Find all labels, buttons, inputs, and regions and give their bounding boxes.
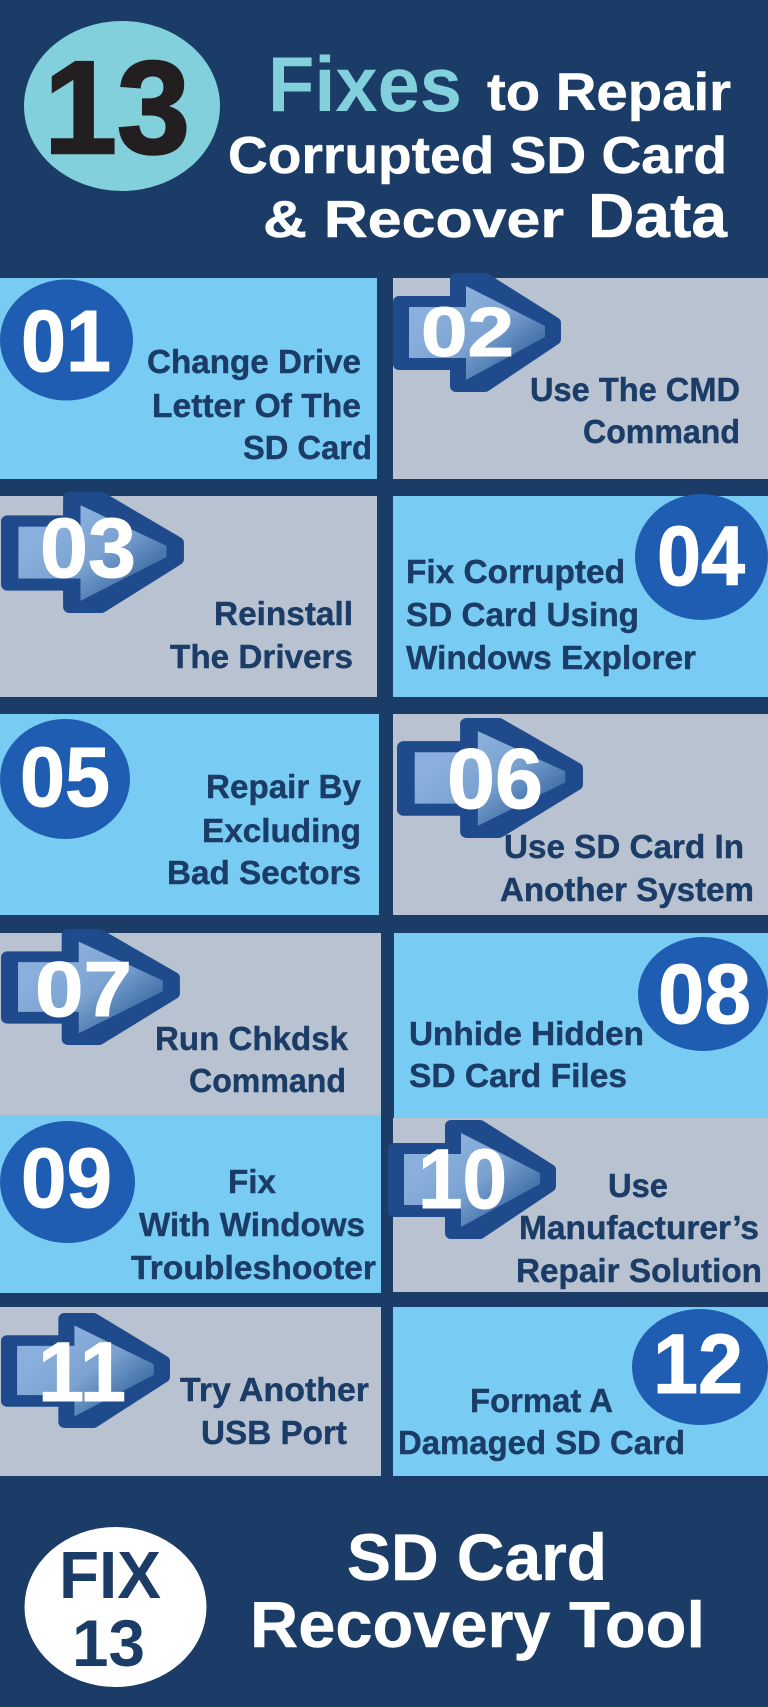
title: Corrupted SD Card xyxy=(228,127,727,185)
text: Change Drive Letter Of The SD Card: Letter Of The xyxy=(152,387,361,424)
panel: fix 01 xyxy=(0,278,377,479)
text: Fix With Windows Troubleshooter: With Windows xyxy=(139,1206,365,1243)
text: Use SD Card In Another System xyxy=(500,828,754,908)
footer title: Recovery Tool xyxy=(250,1588,705,1661)
text: Fix With Windows Troubleshooter xyxy=(131,1163,376,1286)
badge: 04: 04 xyxy=(657,509,745,603)
panel: fix 08 xyxy=(394,933,768,1120)
badge: fix 13 xyxy=(24,1527,206,1687)
text: Change Drive Letter Of The SD Card: SD Card xyxy=(243,429,372,466)
panel: fix 07 xyxy=(0,933,381,1115)
panel: fix 10 xyxy=(393,1118,768,1292)
text: Format A Damaged SD Card xyxy=(398,1382,685,1461)
panel: fix 06 xyxy=(393,714,768,915)
text: Format A Damaged SD Card: Format A xyxy=(470,1382,613,1419)
text: Run Chkdsk Command xyxy=(155,1020,349,1099)
panel: fix 09 xyxy=(0,1115,381,1293)
badge: 13 xyxy=(24,21,220,191)
text: Use The CMD Command: Use The CMD xyxy=(530,371,740,408)
arrow: 07 xyxy=(7,935,174,1039)
text: Fix Corrupted SD Card Using Windows Explorer: Windows Explorer xyxy=(406,639,696,676)
text: Fix Corrupted SD Card Using Windows Explorer: Fix Corrupted xyxy=(406,553,625,590)
title: & Recover xyxy=(263,191,564,249)
panel: fix 05 xyxy=(0,714,379,915)
text: Use SD Card In Another System: Another System xyxy=(500,871,754,908)
badge: fix 13: 13 xyxy=(72,1606,145,1680)
badge: 08 xyxy=(638,937,768,1051)
text: Repair By Excluding Bad Sectors: Excluding xyxy=(202,812,361,849)
panel: fix 04 xyxy=(393,494,768,697)
text: Format A Damaged SD Card: Damaged SD Card xyxy=(398,1424,685,1461)
panel: fix 12 xyxy=(393,1307,768,1476)
title: Fixes xyxy=(268,40,462,128)
text: Reinstall The Drivers: The Drivers xyxy=(170,638,353,675)
number: 02: 02 xyxy=(421,293,514,371)
badge: 04 xyxy=(635,494,768,620)
text: Try Another USB Port xyxy=(180,1371,369,1451)
text: Use Manufacturer's Repair Solution: Manufacturer’s xyxy=(519,1209,759,1246)
text: Fix Corrupted SD Card Using Windows Explorer xyxy=(406,553,696,676)
text: Repair By Excluding Bad Sectors: Repair By xyxy=(206,768,362,805)
footer: fix 13 xyxy=(24,1520,705,1687)
panel: fix 02 xyxy=(393,278,768,479)
text: Change Drive Letter Of The SD Card xyxy=(147,343,372,466)
text: Run Chkdsk Command: Command xyxy=(189,1062,346,1099)
text: Unhide Hidden SD Card Files: SD Card Files xyxy=(409,1057,627,1094)
badge: 13: 13 xyxy=(44,34,190,181)
arrow: 03 xyxy=(8,498,177,607)
badge: 09 xyxy=(0,1121,135,1243)
text: Try Another USB Port: USB Port xyxy=(201,1414,347,1451)
title xyxy=(228,40,731,251)
arrow: 10 xyxy=(394,1126,550,1233)
panel: fix 03 xyxy=(0,496,377,697)
title: Data xyxy=(588,182,728,251)
text: Use Manufacturer's Repair Solution: Use xyxy=(608,1167,668,1204)
footer title: SD Card xyxy=(347,1520,607,1594)
text: Use The CMD Command xyxy=(530,371,740,450)
number: 11: 11 xyxy=(38,1325,126,1419)
text: Try Another USB Port: Try Another xyxy=(180,1371,369,1408)
header xyxy=(24,21,731,251)
text: Reinstall The Drivers xyxy=(170,595,353,675)
number: 03: 03 xyxy=(40,501,136,595)
badge: 09: 09 xyxy=(21,1131,112,1225)
text: Use Manufacturer's Repair Solution: Repair Solution xyxy=(516,1252,762,1289)
text: Fix With Windows Troubleshooter: Fix xyxy=(228,1163,277,1200)
number: 07: 07 xyxy=(35,945,132,1033)
title: to Repair xyxy=(487,63,731,122)
arrow: 02 xyxy=(399,279,555,386)
badge: 01 xyxy=(0,280,133,400)
text: Repair By Excluding Bad Sectors xyxy=(167,768,362,891)
text: Reinstall The Drivers: Reinstall xyxy=(214,595,353,632)
text: Change Drive Letter Of The SD Card: Change Drive xyxy=(147,343,361,380)
arrow: 06 xyxy=(404,724,576,832)
text: Use SD Card In Another System: Use SD Card In xyxy=(504,828,744,865)
text: Run Chkdsk Command: Run Chkdsk xyxy=(155,1020,349,1057)
badge: 05 xyxy=(0,719,130,839)
badge: 12: 12 xyxy=(653,1317,743,1411)
text: Use Manufacturer's Repair Solution xyxy=(516,1167,762,1289)
badge: 08: 08 xyxy=(658,947,751,1041)
badge: 01: 01 xyxy=(21,293,111,390)
badge: 05: 05 xyxy=(20,730,110,824)
number: 10: 10 xyxy=(418,1132,507,1226)
footer title xyxy=(250,1520,705,1661)
panel: fix 11 xyxy=(0,1307,381,1476)
arrow: 11 xyxy=(7,1319,164,1422)
badge: 12 xyxy=(632,1309,768,1425)
text: Unhide Hidden SD Card Files: Unhide Hidden xyxy=(409,1015,644,1052)
text: Fix With Windows Troubleshooter: Troubleshooter xyxy=(131,1249,376,1286)
badge: fix 13: FIX xyxy=(59,1538,161,1613)
text: Repair By Excluding Bad Sectors: Bad Sectors xyxy=(167,854,361,891)
number: 06: 06 xyxy=(447,732,543,827)
text: Use The CMD Command: Command xyxy=(583,413,740,450)
text: Fix Corrupted SD Card Using Windows Explorer: SD Card Using xyxy=(406,596,639,633)
text: Unhide Hidden SD Card Files xyxy=(409,1015,644,1094)
